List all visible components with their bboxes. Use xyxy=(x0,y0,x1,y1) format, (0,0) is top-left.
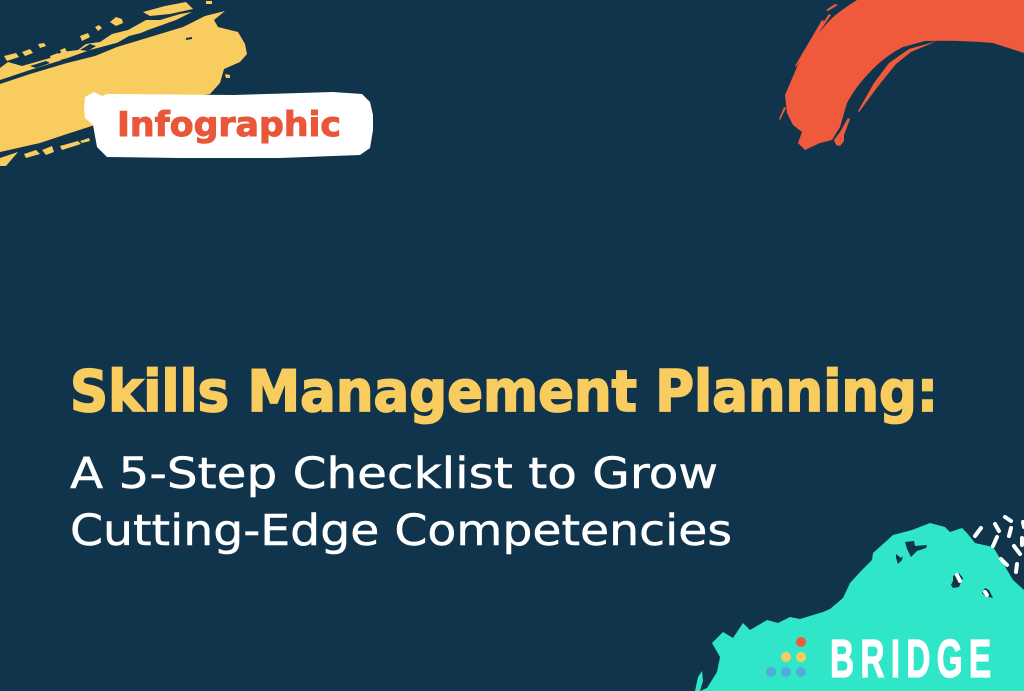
icon: logo dots xyxy=(766,637,806,677)
icon: teal brush stroke xyxy=(695,517,1024,691)
logo wordmark: BRIDGE xyxy=(830,628,997,689)
icon: dark flecks in yellow brush xyxy=(30,21,195,68)
subtitle: Cutting-Edge Competencies xyxy=(70,506,732,556)
label: Infographic: Infographic xyxy=(117,105,341,145)
icon: red-orange arc brush stroke xyxy=(779,0,1024,150)
icon: white label brush xyxy=(84,92,373,158)
icon: white dashes xyxy=(957,517,1024,595)
subtitle: A 5-Step Checklist to Grow xyxy=(70,449,718,499)
icon: dark flecks on teal brush xyxy=(896,541,993,598)
logo: Bridge xyxy=(766,628,997,689)
subtitle xyxy=(70,449,732,556)
icon: yellow brush stroke xyxy=(0,1,247,166)
title: Skills Management Planning: xyxy=(70,359,938,425)
